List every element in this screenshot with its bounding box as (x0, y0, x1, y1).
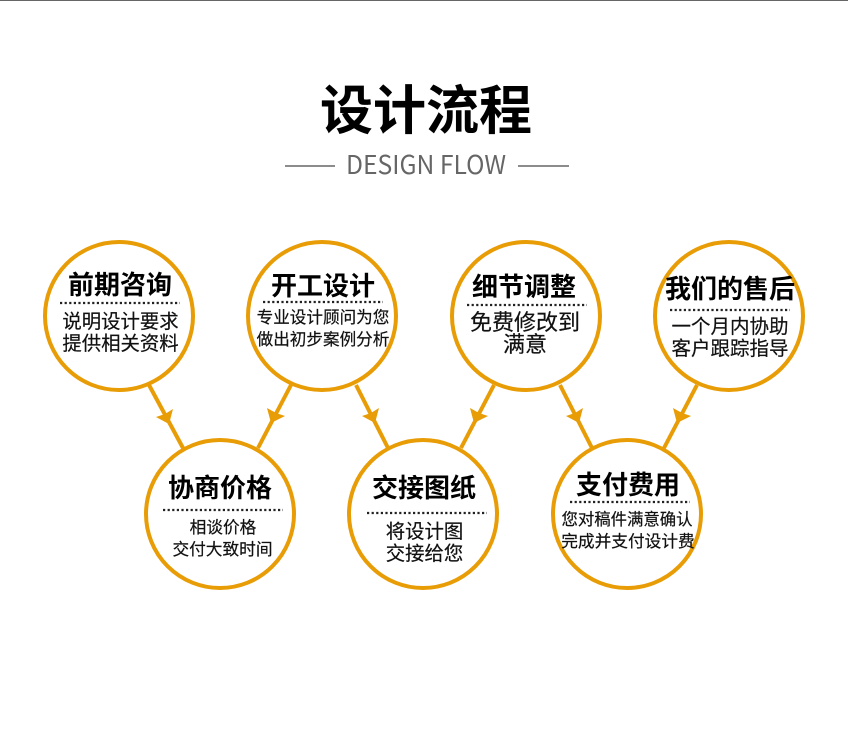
step 6: 支付费用: 完成并支付设计费 (561, 532, 695, 551)
title: 设计流程 (320, 69, 532, 145)
subtitle: DESIGN FLOW: DESIGN FLOW (346, 145, 506, 182)
step 1: 前期咨询: 说明设计要求 (62, 311, 179, 333)
step 7: 我们的售后: 我们的售后 (665, 274, 795, 304)
step 2: 协商价格: 相谈价格 (190, 518, 257, 537)
step 4: 交接图纸 (349, 440, 497, 588)
step 2: 协商价格: 协商价格 (168, 473, 272, 503)
arrow: step 6 to step 7 (664, 385, 697, 448)
step 6: 支付费用: 支付费用 (576, 470, 680, 500)
step 4: 交接图纸: 将设计图 (386, 521, 463, 543)
step 5: 细节调整: 细节调整 (472, 272, 576, 302)
step 6: 支付费用 (553, 440, 701, 588)
step 2: 协商价格: 交付大致时间 (172, 540, 273, 559)
step 4: 交接图纸: 交接图纸 (372, 473, 476, 503)
arrow: step 1 to step 2 (149, 385, 183, 448)
step 7: 我们的售后: 客户跟踪指导 (671, 338, 789, 360)
step 3: 开工设计 (248, 242, 396, 390)
step 6: 支付费用: 您对稿件满意确认 (561, 510, 693, 529)
step 5: 细节调整: 满意 (503, 332, 547, 357)
arrow: step 3 to step 4 (356, 385, 388, 448)
step 2: 协商价格 (146, 440, 294, 588)
step 3: 开工设计: 专业设计顾问为您 (257, 308, 389, 327)
step 1: 前期咨询 (45, 242, 193, 390)
step 1: 前期咨询: 提供相关资料 (62, 333, 179, 355)
step 3: 开工设计: 做出初步案例分析 (257, 330, 389, 349)
step 5: 细节调整 (452, 242, 600, 390)
arrow: step 4 to step 5 (461, 385, 494, 448)
step 4: 交接图纸: 交接给您 (386, 543, 463, 565)
step 3: 开工设计: 开工设计 (271, 271, 375, 301)
step 7: 我们的售后 (655, 242, 803, 390)
arrow: step 5 to step 6 (560, 385, 592, 448)
step 1: 前期咨询: 前期咨询 (68, 270, 172, 300)
arrow: step 2 to step 3 (258, 385, 291, 448)
step 5: 细节调整: 免费修改到 (470, 310, 580, 335)
step 7: 我们的售后: 一个月内协助 (671, 316, 789, 338)
